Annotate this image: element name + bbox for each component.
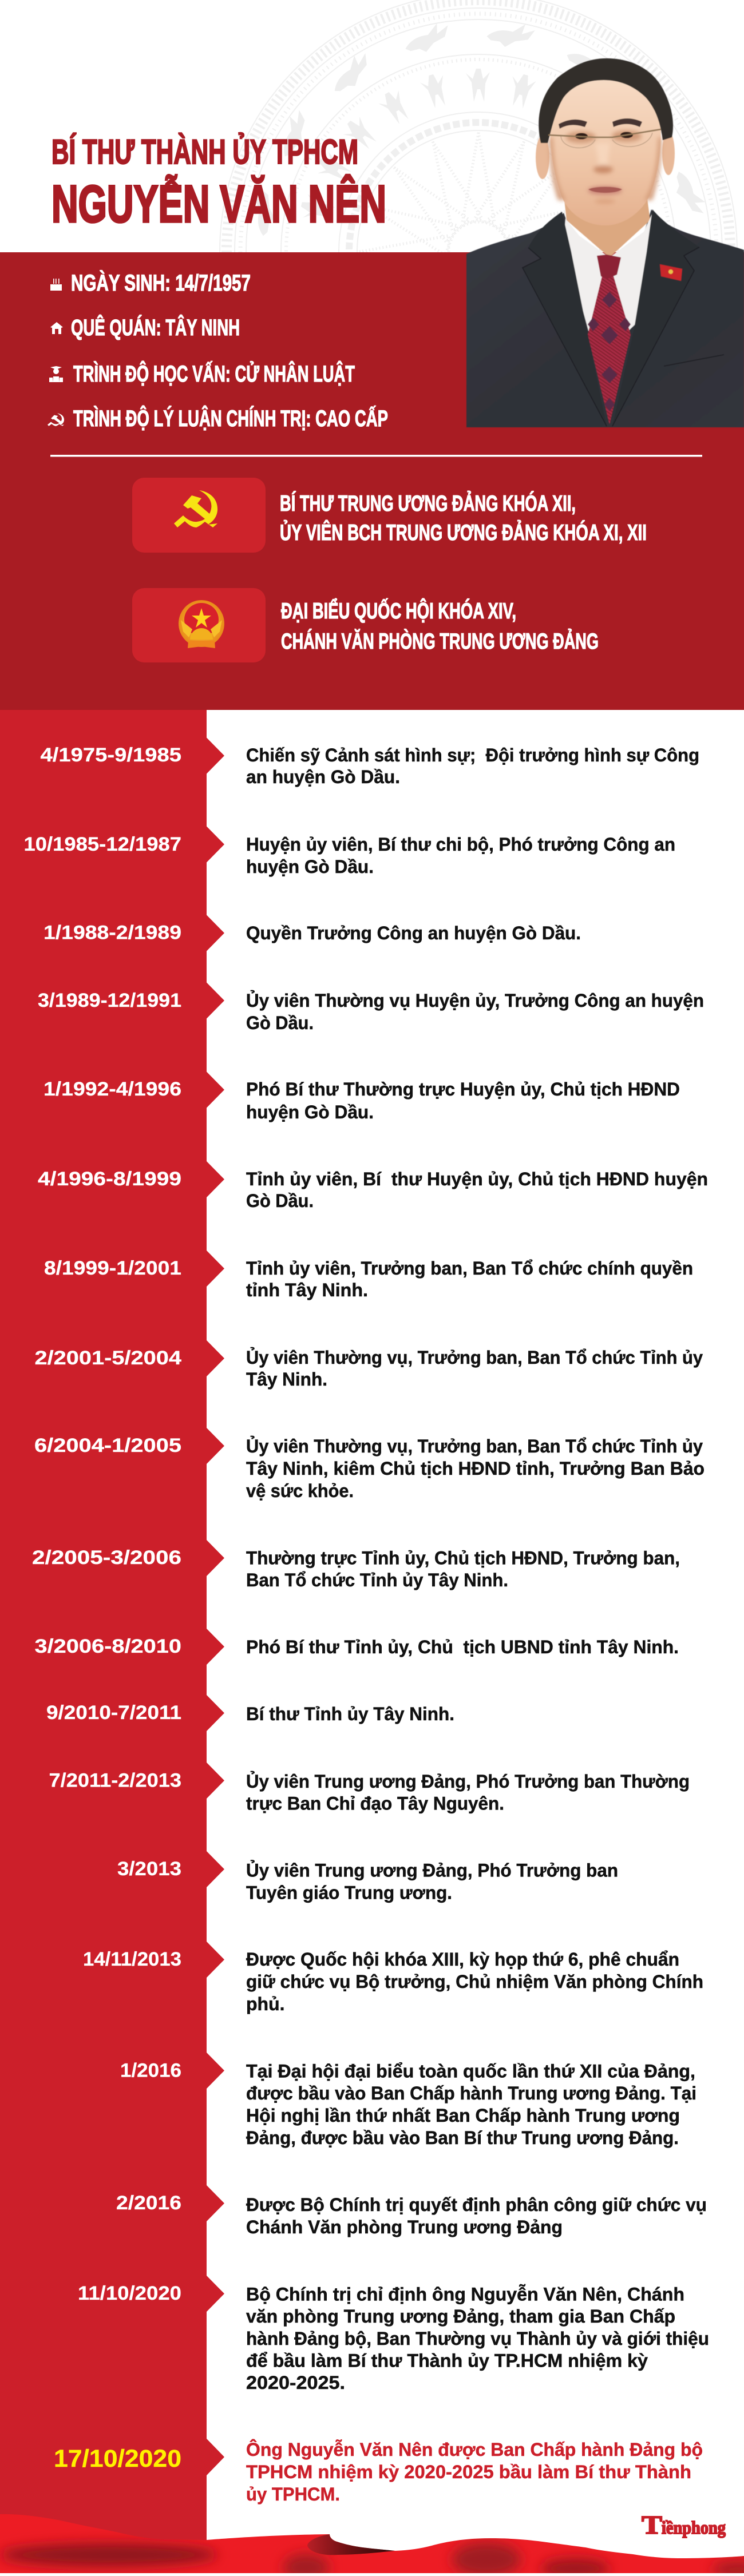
info list xyxy=(48,270,388,431)
timeline row 8 xyxy=(34,1340,703,1390)
national position text: CHÁNH VĂN PHÒNG TRUNG ƯƠNG ĐẢNG xyxy=(281,629,599,654)
timeline row 1 xyxy=(40,738,699,787)
timeline row 11: 3/2006-8/2010 xyxy=(34,1636,181,1657)
timeline row 15 xyxy=(83,1942,703,2014)
timeline row 3 xyxy=(43,915,581,951)
timeline row 9: 6/2004-1/2005 xyxy=(34,1435,181,1456)
timeline row 6 xyxy=(38,1161,708,1211)
timeline row 11 xyxy=(34,1629,679,1665)
timeline row 10: 2/2005-3/2006 xyxy=(32,1547,181,1569)
timeline row 7 xyxy=(44,1251,693,1300)
timeline row 1: 4/1975-9/1985 xyxy=(40,744,181,766)
logo: Tiền Phong xyxy=(642,2510,726,2539)
timeline row 18: 2020-2025. xyxy=(246,2372,345,2393)
background: bronze drum watermark xyxy=(219,0,738,252)
timeline row 5: 1/1992-4/1996 xyxy=(43,1078,181,1100)
timeline row 9 xyxy=(34,1428,705,1501)
timeline row 17: 2/2016 xyxy=(116,2192,181,2214)
timeline row 18: hành Đảng bộ, Ban Thường vụ Thành ủy và giới thiệu xyxy=(246,2328,709,2349)
timeline row 19: highlighted: 17/10/2020 xyxy=(54,2445,181,2472)
timeline row 5: Phó Bí thư Thường trực Huyện ủy, Chủ tịch HĐND xyxy=(246,1079,680,1100)
timeline row 10 xyxy=(32,1540,680,1590)
timeline row 16: Đảng, được bầu vào Ban Bí thư Trung ương Đảng. xyxy=(246,2128,679,2148)
timeline row 7: 8/1999-1/2001 xyxy=(44,1257,181,1279)
timeline row 4: Ủy viên Thường vụ Huyện ủy, Trưởng Công an huyện xyxy=(246,990,704,1011)
timeline row 19: highlighted xyxy=(54,2439,703,2504)
timeline row 10: Ban Tổ chức Tỉnh ủy Tây Ninh. xyxy=(246,1570,508,1590)
timeline row 16: Tại Đại hội đại biểu toàn quốc lần thứ XII của Đảng, xyxy=(246,2061,695,2081)
national position text xyxy=(281,598,599,654)
logo: Tiền Phong: iềnphong xyxy=(662,2517,726,2538)
timeline row 4: Gò Dầu. xyxy=(246,1013,314,1033)
timeline row 18: Bộ Chính trị chỉ định ông Nguyễn Văn Nên, Chánh xyxy=(246,2284,684,2304)
timeline row 8: 2/2001-5/2004 xyxy=(34,1347,181,1369)
portrait photo xyxy=(466,58,744,427)
timeline row 12: 9/2010-7/2011 xyxy=(46,1702,181,1724)
party position text: BÍ THƯ TRUNG ƯƠNG ĐẢNG KHÓA XII, xyxy=(280,491,576,516)
icon box: party emblem xyxy=(132,478,266,553)
education: TRÌNH ĐỘ HỌC VẤN: CỬ NHÂN LUẬT xyxy=(73,360,355,387)
title xyxy=(52,133,386,233)
timeline row 16: được bầu vào Ban Chấp hành Trung ương Đảng. Tại xyxy=(246,2083,696,2103)
timeline row 2: 10/1985-12/1987 xyxy=(24,833,181,855)
timeline row 6: Gò Dầu. xyxy=(246,1190,314,1211)
timeline red column xyxy=(0,710,207,2552)
timeline row 17 xyxy=(116,2185,707,2237)
timeline row 19: highlighted: TPHCM nhiệm kỳ 2020-2025 bầu làm Bí thư Thành xyxy=(246,2462,691,2482)
icon box: national emblem xyxy=(132,588,266,662)
party position text xyxy=(280,491,647,545)
timeline row 1: Chiến sỹ Cảnh sát hình sự; Đội trưởng hình sự Công xyxy=(246,745,699,765)
timeline row 2: Huyện ủy viên, Bí thư chi bộ, Phó trưởng Công an xyxy=(246,834,675,855)
timeline row 19: highlighted: Ông Nguyễn Văn Nên được Ban Chấp hành Đảng bộ xyxy=(246,2439,703,2460)
timeline row 13 xyxy=(49,1763,690,1813)
timeline row 10: Thường trực Tỉnh ủy, Chủ tịch HĐND, Trưởng ban, xyxy=(246,1548,680,1569)
timeline row 11: Phó Bí thư Tỉnh ủy, Chủ tịch UBND tỉnh Tây Ninh. xyxy=(246,1637,679,1657)
timeline row 17: Chánh Văn phòng Trung ương Đảng xyxy=(246,2217,563,2237)
timeline row 1: an huyện Gò Dầu. xyxy=(246,767,400,787)
timeline row 14: Tuyên giáo Trung ương. xyxy=(246,1882,452,1903)
timeline row 12: Bí thư Tỉnh ủy Tây Ninh. xyxy=(246,1704,454,1724)
hometown: QUÊ QUÁN: TÂY NINH xyxy=(71,314,240,340)
timeline row 18: 11/10/2020 xyxy=(78,2283,181,2304)
timeline row 14: 3/2013 xyxy=(117,1858,181,1880)
timeline row 16: Hội nghị lần thứ nhất Ban Chấp hành Trung ương xyxy=(246,2105,680,2126)
title: NGUYỄN VĂN NÊN xyxy=(52,174,386,233)
timeline row 9: Ủy viên Thường vụ, Trưởng ban, Ban Tổ chức Tỉnh ủy xyxy=(246,1436,703,1456)
timeline row 5 xyxy=(43,1072,680,1122)
title: BÍ THƯ THÀNH ỦY TPHCM xyxy=(52,133,358,171)
timeline row 6: 4/1996-8/1999 xyxy=(38,1168,181,1190)
timeline row 19: highlighted: ủy TPHCM. xyxy=(246,2484,340,2504)
timeline row 14 xyxy=(117,1851,618,1903)
timeline row 9: Tây Ninh, kiêm Chủ tịch HĐND tỉnh, Trưởng Ban Bảo xyxy=(246,1458,705,1479)
timeline row 8: Tây Ninh. xyxy=(246,1369,327,1390)
timeline row 15: Được Quốc hội khóa XIII, kỳ họp thứ 6, phê chuẩn xyxy=(246,1949,679,1970)
timeline row 5: huyện Gò Dầu. xyxy=(246,1102,374,1122)
timeline row 7: Tỉnh ủy viên, Trưởng ban, Ban Tổ chức chính quyền xyxy=(246,1258,693,1279)
timeline row 13: trực Ban Chỉ đạo Tây Nguyên. xyxy=(246,1793,504,1813)
timeline row 3: Quyền Trưởng Công an huyện Gò Dầu. xyxy=(246,923,581,943)
timeline row 17: Được Bộ Chính trị quyết định phân công giữ chức vụ xyxy=(246,2194,707,2215)
timeline row 7: tỉnh Tây Ninh. xyxy=(246,1280,368,1300)
timeline row 3: 1/1988-2/1989 xyxy=(43,922,181,944)
timeline row 13: Ủy viên Trung ương Đảng, Phó Trưởng ban Thường xyxy=(246,1771,690,1792)
timeline row 6: Tỉnh ủy viên, Bí thư Huyện ủy, Chủ tịch HĐND huyện xyxy=(246,1169,708,1189)
political theory level: TRÌNH ĐỘ LÝ LUẬN CHÍNH TRỊ: CAO CẤP xyxy=(73,405,388,431)
timeline row 13: 7/2011-2/2013 xyxy=(49,1770,181,1792)
timeline row 8: Ủy viên Thường vụ, Trưởng ban, Ban Tổ chức Tỉnh ủy xyxy=(246,1347,703,1368)
panel: party positions xyxy=(132,478,647,553)
icon: house xyxy=(50,322,63,334)
timeline row 9: vệ sức khỏe. xyxy=(246,1480,354,1501)
icon: birthday cake xyxy=(50,279,62,291)
timeline row 15: 14/11/2013 xyxy=(83,1948,181,1970)
icon: small hammer and sickle xyxy=(48,413,64,426)
timeline row 2 xyxy=(24,826,675,877)
birth date: NGÀY SINH: 14/7/1957 xyxy=(71,270,251,296)
timeline row 4: 3/1989-12/1991 xyxy=(38,990,181,1011)
timeline row 2: huyện Gò Dầu. xyxy=(246,856,374,877)
red ribbon xyxy=(0,2514,744,2573)
timeline row 16 xyxy=(120,2053,696,2148)
timeline row 14: Ủy viên Trung ương Đảng, Phó Trưởng ban xyxy=(246,1860,618,1881)
timeline row 16: 1/2016 xyxy=(120,2059,181,2081)
panel: national positions xyxy=(132,588,599,662)
panel: profile background xyxy=(0,252,744,710)
icon: graduate xyxy=(49,366,63,382)
timeline row 18: văn phòng Trung ương Đảng, tham gia Ban Chấp xyxy=(246,2306,675,2327)
logo: Tiền Phong: T xyxy=(642,2510,662,2539)
timeline row 12 xyxy=(46,1695,454,1731)
timeline row 15: phủ. xyxy=(246,1994,285,2014)
national position text: ĐẠI BIỂU QUỐC HỘI KHÓA XIV, xyxy=(281,598,516,624)
timeline row 4 xyxy=(38,983,704,1033)
timeline row 18: để bầu làm Bí thư Thành ủy TP.HCM nhiệm kỳ xyxy=(246,2350,648,2371)
timeline row 15: giữ chức vụ Bộ trưởng, Chủ nhiệm Văn phòng Chính xyxy=(246,1971,703,1992)
timeline row 18 xyxy=(78,2276,709,2393)
